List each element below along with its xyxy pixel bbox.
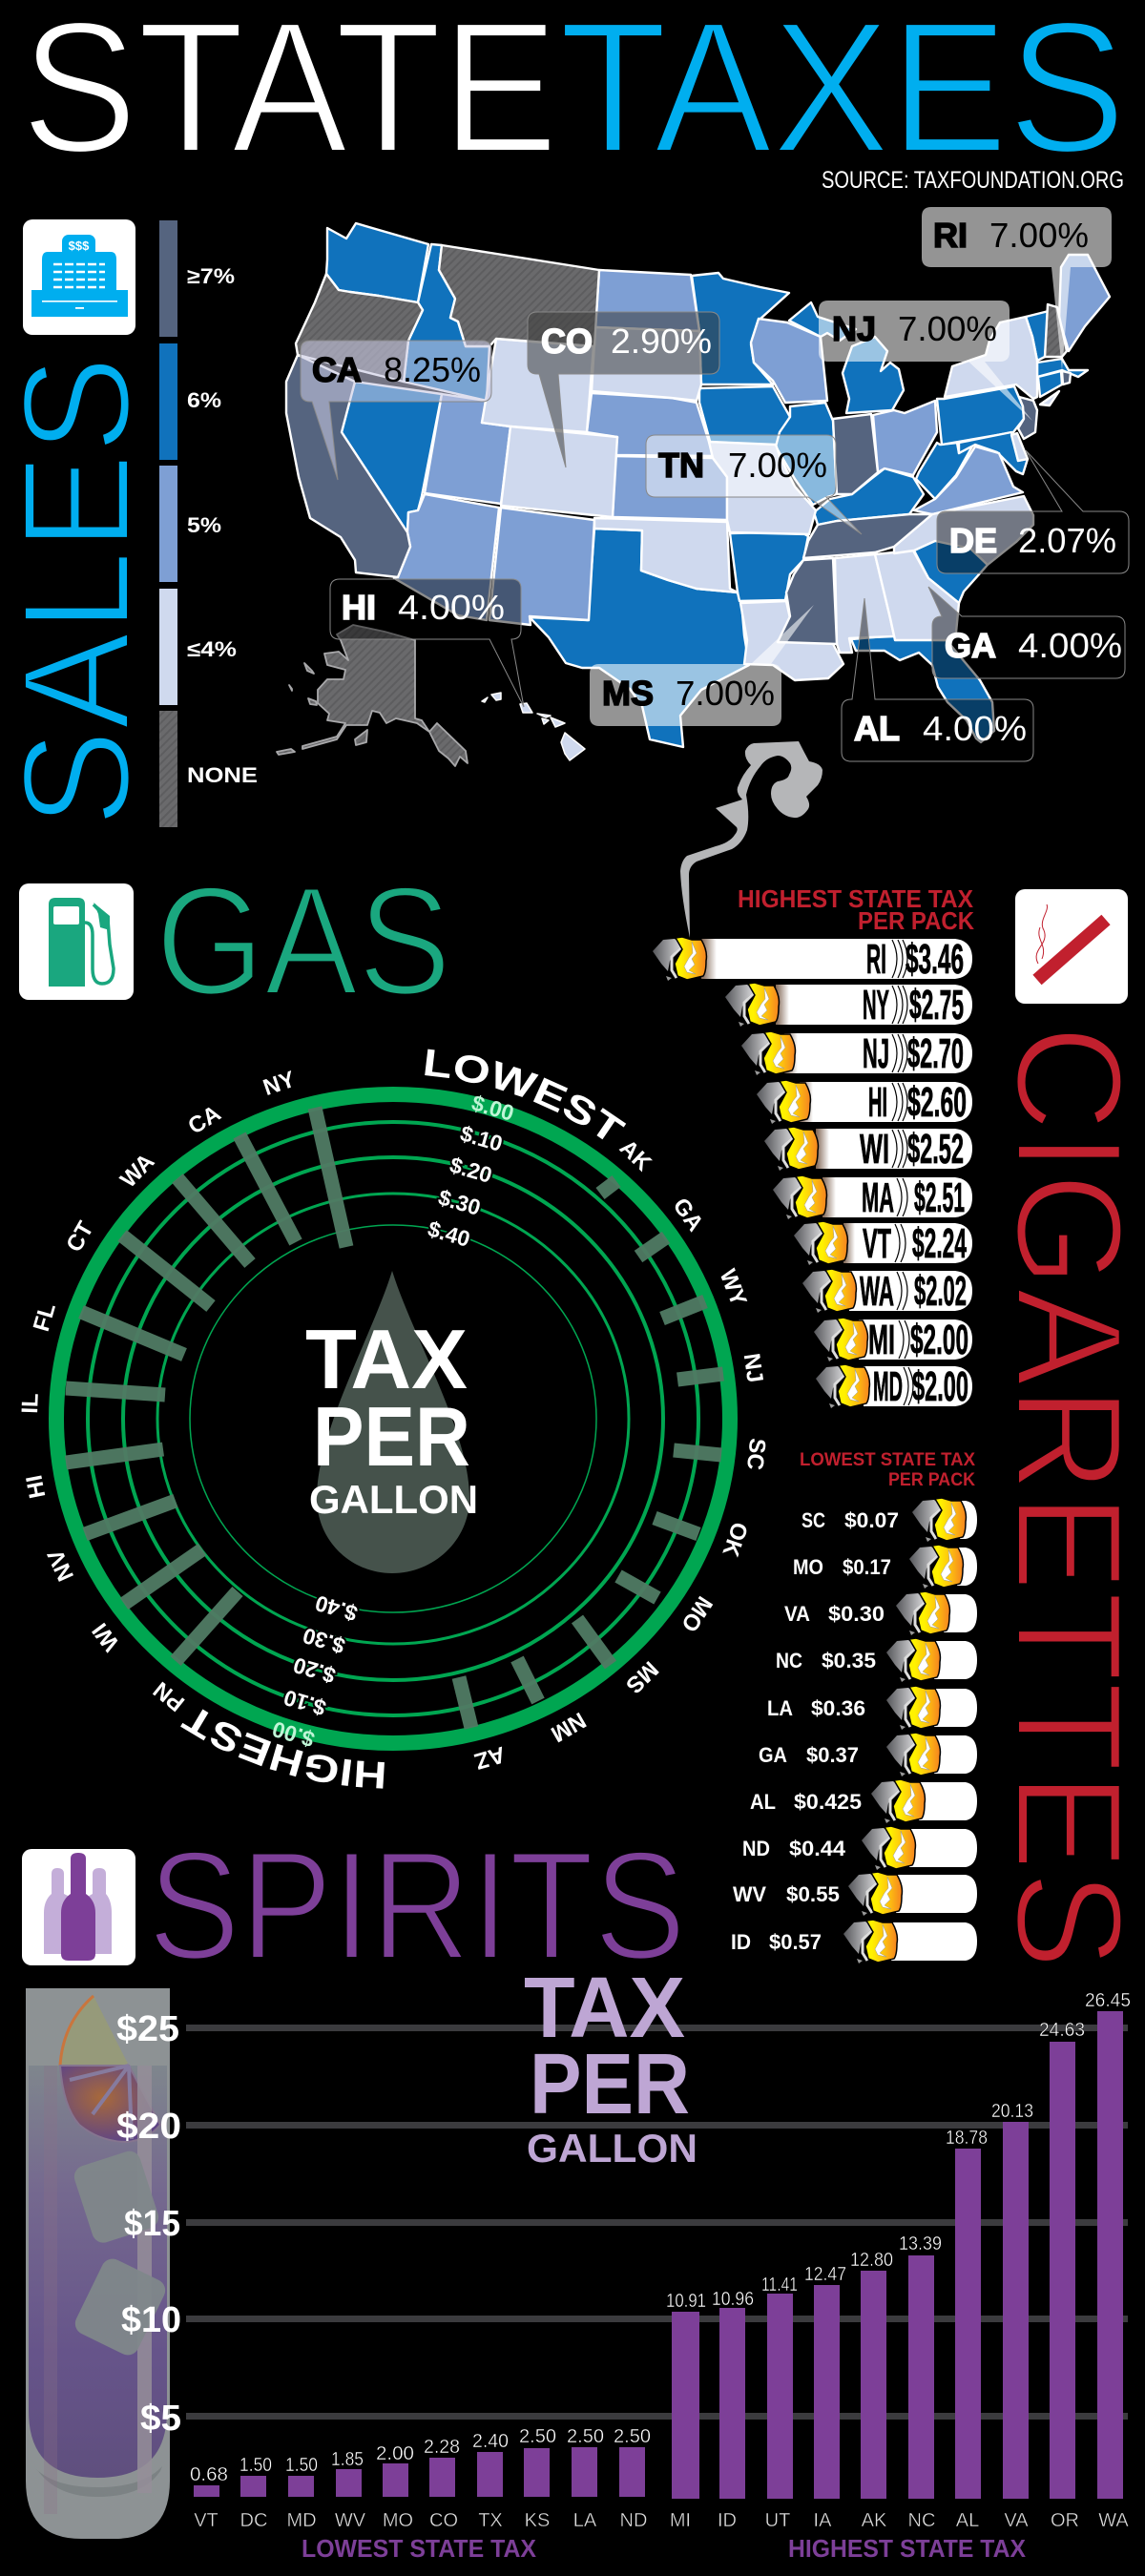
callout: TN: 7.00% xyxy=(728,446,827,485)
state labels: IL xyxy=(17,1393,44,1414)
states at 4 percent or less xyxy=(482,317,1059,680)
map: sales tax by state xyxy=(277,223,1110,766)
state labels: WY xyxy=(715,1266,752,1309)
state labels: NV xyxy=(43,1546,79,1585)
cigarette: WV: WV xyxy=(733,1882,766,1906)
cigarette: VT: VT xyxy=(863,1220,891,1267)
cigarette: MA: MA xyxy=(862,1174,894,1221)
cigarette: WV: $0.55 xyxy=(786,1882,840,1906)
y axis labels: $5 xyxy=(140,2399,181,2439)
cigarette: NJ xyxy=(741,1030,972,1077)
state labels: SC xyxy=(741,1437,770,1471)
heading: highest cigarette tax: HIGHEST STATE TAX xyxy=(738,884,974,913)
callout: RI xyxy=(922,207,1112,370)
center label: tax per gallon xyxy=(524,1961,697,2171)
heading: highest cigarette tax xyxy=(738,884,974,935)
state labels: ND xyxy=(620,2510,647,2531)
glass highlight xyxy=(137,2066,152,2493)
state labels: HI xyxy=(21,1473,51,1501)
cigarette: AL xyxy=(750,1779,977,1823)
dial scale labels: $.20 xyxy=(447,1152,495,1188)
cigarette: ID: ID xyxy=(731,1930,751,1954)
state labels: WA xyxy=(1098,2510,1129,2531)
chart: spirits tax xyxy=(116,1961,1131,2563)
cigarette: AL: AL xyxy=(750,1790,776,1814)
dial scale labels: $.40 xyxy=(312,1590,361,1627)
dial scale labels: $.00 xyxy=(468,1090,517,1126)
ice cube xyxy=(72,2149,161,2246)
callout: NJ: 7.00% xyxy=(898,309,997,348)
state labels: WV xyxy=(335,2510,366,2531)
icon: cash register xyxy=(23,219,135,335)
value labels: 2.00 xyxy=(376,2443,414,2464)
dial scale labels: $.00 xyxy=(269,1716,318,1753)
value labels: 0.68 xyxy=(190,2464,228,2485)
value labels: 2.50 xyxy=(614,2426,651,2447)
dial scale labels: $.40 xyxy=(425,1215,473,1252)
cigarette: MA: $2.51 xyxy=(914,1174,965,1221)
axis group label: lowest: LOWEST STATE TAX xyxy=(302,2534,537,2563)
legend: sales rates: 6% xyxy=(187,388,221,412)
state labels: IA xyxy=(814,2510,832,2531)
center label: tax per gallon: PER xyxy=(313,1389,470,1484)
dial rings xyxy=(56,1094,730,1743)
state labels: TX xyxy=(478,2510,503,2531)
center label: tax per gallon: TAX xyxy=(524,1961,685,2056)
cigarette: HI xyxy=(757,1079,972,1126)
cigarette: AL: $0.425 xyxy=(794,1790,862,1814)
callout: GA: 4.00% xyxy=(1018,626,1122,665)
cigarette: MI: MI xyxy=(868,1317,895,1363)
state labels: LA xyxy=(573,2510,597,2531)
bars xyxy=(194,2011,1123,2499)
state labels xyxy=(17,1067,770,1774)
legend: sales rates: ≥7% xyxy=(187,264,235,288)
state labels: MI xyxy=(670,2510,691,2531)
state labels: VT xyxy=(194,2510,219,2531)
cigarette: VA: VA xyxy=(784,1602,810,1626)
ice cube xyxy=(72,2255,169,2358)
cigarette: VA xyxy=(784,1591,977,1635)
heading: spirits: SPIRITS xyxy=(148,1819,686,1992)
dial scale labels: $.10 xyxy=(457,1120,506,1156)
value labels: 12.47 xyxy=(804,2264,846,2285)
cigarette: SC xyxy=(802,1498,977,1542)
states at 6 percent xyxy=(326,223,1088,747)
state labels: UT xyxy=(765,2510,790,2531)
value labels: 10.91 xyxy=(666,2291,706,2312)
dial scale labels: $.10 xyxy=(281,1685,329,1721)
callout: RI: RI xyxy=(933,216,968,255)
curved label: lowest: LOWEST xyxy=(425,1049,626,1139)
state labels: CT xyxy=(61,1217,99,1257)
cigarette: MI xyxy=(814,1317,972,1363)
state labels: GA xyxy=(668,1194,708,1236)
callout: NJ xyxy=(819,301,1032,421)
y axis labels xyxy=(116,2009,181,2439)
value labels: 11.41 xyxy=(761,2275,798,2296)
state labels: NC xyxy=(908,2510,935,2531)
callout: CA: CA xyxy=(312,350,362,389)
cigarette: ND xyxy=(742,1826,977,1870)
state labels: NM xyxy=(547,1707,590,1747)
callout: HI: 4.00% xyxy=(398,588,505,627)
cigarette: GA: GA xyxy=(759,1743,787,1767)
left strip xyxy=(44,2066,57,2514)
center label: tax per gallon: TAX xyxy=(305,1312,468,1406)
y axis labels: $15 xyxy=(124,2204,180,2244)
state labels: MO xyxy=(676,1591,718,1636)
dial scale labels: $.30 xyxy=(435,1184,484,1220)
legend: sales rates xyxy=(159,220,258,827)
state labels: OR xyxy=(1051,2510,1079,2531)
callout: GA: GA xyxy=(945,626,996,665)
cigarette: GA: $0.37 xyxy=(806,1743,859,1767)
center label: tax per gallon xyxy=(305,1312,478,1522)
cigarette: RI: $3.46 xyxy=(906,936,964,983)
cigarette: NJ: $2.70 xyxy=(907,1030,964,1077)
value labels: 10.96 xyxy=(712,2289,754,2310)
axis group label: highest: HIGHEST STATE TAX xyxy=(788,2534,1027,2563)
cigarette: WI: WI xyxy=(860,1126,889,1173)
cigarette: NC xyxy=(776,1638,977,1682)
callout: HI xyxy=(330,579,524,707)
cigarette: MO xyxy=(793,1545,977,1589)
value labels: 2.50 xyxy=(519,2426,556,2447)
state labels xyxy=(194,2510,1129,2531)
state labels: MD xyxy=(286,2510,317,2531)
dial scale labels xyxy=(269,1090,517,1753)
value labels xyxy=(190,1990,1131,2485)
chart: lowest cigarette taxes xyxy=(731,1498,977,1963)
callout: MS: MS xyxy=(602,674,654,713)
smoke xyxy=(680,741,822,938)
state labels: AK xyxy=(614,1134,656,1176)
cigarette: RI xyxy=(653,936,972,983)
alaska xyxy=(277,625,468,766)
cigarette: MA xyxy=(773,1174,972,1221)
callout: CO: 2.90% xyxy=(611,322,712,361)
cigarette: ND: ND xyxy=(742,1837,770,1860)
callout: TN: TN xyxy=(658,446,704,485)
value labels: 1.85 xyxy=(331,2449,364,2470)
callout: CA xyxy=(301,341,491,480)
cigarette: MD xyxy=(816,1363,972,1410)
state labels: CO xyxy=(429,2510,458,2531)
cigarette: GA xyxy=(759,1733,977,1776)
center label: tax per gallon: PER xyxy=(530,2037,690,2132)
y axis labels: $25 xyxy=(116,2009,179,2049)
cigarette: NJ: NJ xyxy=(863,1030,889,1077)
state labels: WI xyxy=(87,1618,125,1656)
callout: HI: HI xyxy=(342,588,376,627)
cigarette: ND: $0.44 xyxy=(789,1837,846,1860)
cigarette: LA: $0.36 xyxy=(811,1696,865,1720)
chart: highest cigarette taxes xyxy=(653,936,972,1410)
callout: TN xyxy=(646,435,862,534)
heading: lowest cigarette tax: LOWEST STATE TAX xyxy=(800,1450,975,1470)
heading: lowest cigarette tax: PER PACK xyxy=(888,1470,975,1490)
legend: sales rates: NONE xyxy=(187,763,258,787)
illustration: cocktail glass xyxy=(26,1988,170,2539)
state labels: CA xyxy=(184,1100,225,1140)
liquid xyxy=(29,2066,167,2478)
center label: tax per gallon: GALLON xyxy=(527,2126,697,2171)
callout: AL xyxy=(842,598,1033,761)
callout: DE: DE xyxy=(949,521,997,560)
cigarette: LA: LA xyxy=(767,1696,793,1720)
grid lines xyxy=(186,2025,1128,2420)
value labels: 24.63 xyxy=(1039,2020,1085,2041)
cigarette: NC: $0.35 xyxy=(822,1649,876,1672)
glass body xyxy=(26,1988,170,2539)
callout: DE: 2.07% xyxy=(1018,521,1116,560)
y axis labels: $10 xyxy=(121,2300,181,2340)
orange rind above liquid xyxy=(60,1996,129,2066)
value labels: 1.50 xyxy=(285,2455,318,2476)
title xyxy=(21,0,1126,192)
cigarette: NC: NC xyxy=(776,1649,802,1672)
cigarette: MO: MO xyxy=(793,1555,823,1579)
state labels: OK xyxy=(717,1519,753,1560)
cigarette: MD: MD xyxy=(873,1363,903,1410)
cigarette: WI xyxy=(764,1126,972,1173)
cigarette: WA: $2.02 xyxy=(914,1268,967,1315)
legend: sales rates: ≤4% xyxy=(187,637,237,661)
callout: CO xyxy=(528,312,719,467)
icon: cash register: $$$ xyxy=(69,239,90,253)
cigarette: WA xyxy=(802,1268,972,1315)
callout: CA: 8.25% xyxy=(384,350,481,389)
state labels: DC xyxy=(240,2510,267,2531)
callout: MS: 7.00% xyxy=(676,674,775,713)
cigarette: MO: $0.17 xyxy=(843,1555,891,1579)
cigarette: VT: $2.24 xyxy=(912,1220,967,1267)
cigarette: WA: WA xyxy=(860,1268,894,1315)
state labels: AK xyxy=(862,2510,887,2531)
state labels: WA xyxy=(115,1149,159,1193)
value labels: 13.39 xyxy=(899,2233,942,2254)
cigarette: RI: RI xyxy=(866,936,886,983)
icon: no smoking cigarette xyxy=(1015,889,1128,1004)
cigarette: SC: $0.07 xyxy=(844,1508,899,1532)
cigarette: LA xyxy=(767,1686,977,1730)
cigarette: NY: NY xyxy=(863,982,889,1028)
cigarette: WI: $2.52 xyxy=(907,1126,964,1173)
state labels: ID xyxy=(718,2510,737,2531)
center label: tax per gallon: GALLON xyxy=(309,1477,478,1522)
legend: sales rates: 5% xyxy=(187,513,221,537)
value labels: 1.50 xyxy=(239,2455,272,2476)
cigarette: HI: $2.60 xyxy=(907,1079,967,1126)
dial scale labels: $.30 xyxy=(300,1623,348,1659)
dial scale labels: $.20 xyxy=(290,1652,339,1689)
curved label: highest: HIGHEST xyxy=(180,1710,385,1789)
cigarette: MI: $2.00 xyxy=(910,1317,968,1363)
cigarette: VA: $0.30 xyxy=(828,1602,885,1626)
callout: AL: 4.00% xyxy=(923,709,1027,748)
icon: bottles xyxy=(22,1849,135,1965)
value labels: 2.40 xyxy=(472,2431,509,2452)
heading: lowest cigarette tax xyxy=(800,1450,975,1490)
heading: highest cigarette tax: PER PACK xyxy=(858,906,974,935)
value labels: 26.45 xyxy=(1085,1990,1131,2011)
callout: NJ: NJ xyxy=(832,309,876,348)
cigarette: HI: HI xyxy=(868,1079,887,1126)
callout: DE xyxy=(937,450,1129,573)
cigarette: ID xyxy=(731,1920,977,1963)
states with no sales tax xyxy=(296,245,1067,382)
callout: RI: 7.00% xyxy=(989,216,1089,255)
state labels: NY xyxy=(260,1067,299,1101)
value labels: 18.78 xyxy=(946,2128,988,2149)
cigarette: SC: SC xyxy=(802,1508,825,1532)
value labels: 2.50 xyxy=(567,2426,604,2447)
state labels: KS xyxy=(525,2510,550,2531)
state labels: AL xyxy=(956,2510,979,2531)
state labels: AZ xyxy=(471,1741,508,1774)
callout: CO: CO xyxy=(541,322,593,361)
cigarette: WV xyxy=(733,1872,977,1916)
chart: gas tax radial xyxy=(17,1049,770,1789)
state labels: PN xyxy=(149,1676,190,1716)
value labels: 2.28 xyxy=(424,2437,460,2458)
radial bars xyxy=(66,1108,723,1728)
glass base shading xyxy=(33,2466,162,2497)
cigarette: NY: $2.75 xyxy=(909,982,964,1028)
value labels: 12.80 xyxy=(850,2250,893,2271)
cigarette: MD: $2.00 xyxy=(912,1363,968,1410)
orange slice in liquid xyxy=(60,2066,160,2142)
state labels: NJ xyxy=(739,1352,768,1384)
icon: gas pump xyxy=(19,883,134,1000)
callout: AL: AL xyxy=(854,709,900,748)
hawaii islands xyxy=(482,693,585,760)
callout: MS xyxy=(590,605,814,726)
cigarette: ID: $0.57 xyxy=(769,1930,822,1954)
state labels: VA xyxy=(1004,2510,1029,2531)
state labels: FL xyxy=(29,1300,61,1334)
cigarette: NY xyxy=(725,982,972,1028)
state labels: MS xyxy=(620,1656,663,1698)
icon: oil drop xyxy=(317,1271,469,1573)
states at 7 percent or more xyxy=(286,355,1071,644)
y axis labels: $20 xyxy=(116,2107,181,2147)
value labels: 20.13 xyxy=(991,2101,1033,2122)
cigarette: VT xyxy=(794,1220,972,1267)
heading: gas: GAS xyxy=(156,855,451,1028)
states at 5 percent xyxy=(394,255,1110,625)
callout: GA xyxy=(928,587,1125,678)
state labels: MO xyxy=(383,2510,413,2531)
